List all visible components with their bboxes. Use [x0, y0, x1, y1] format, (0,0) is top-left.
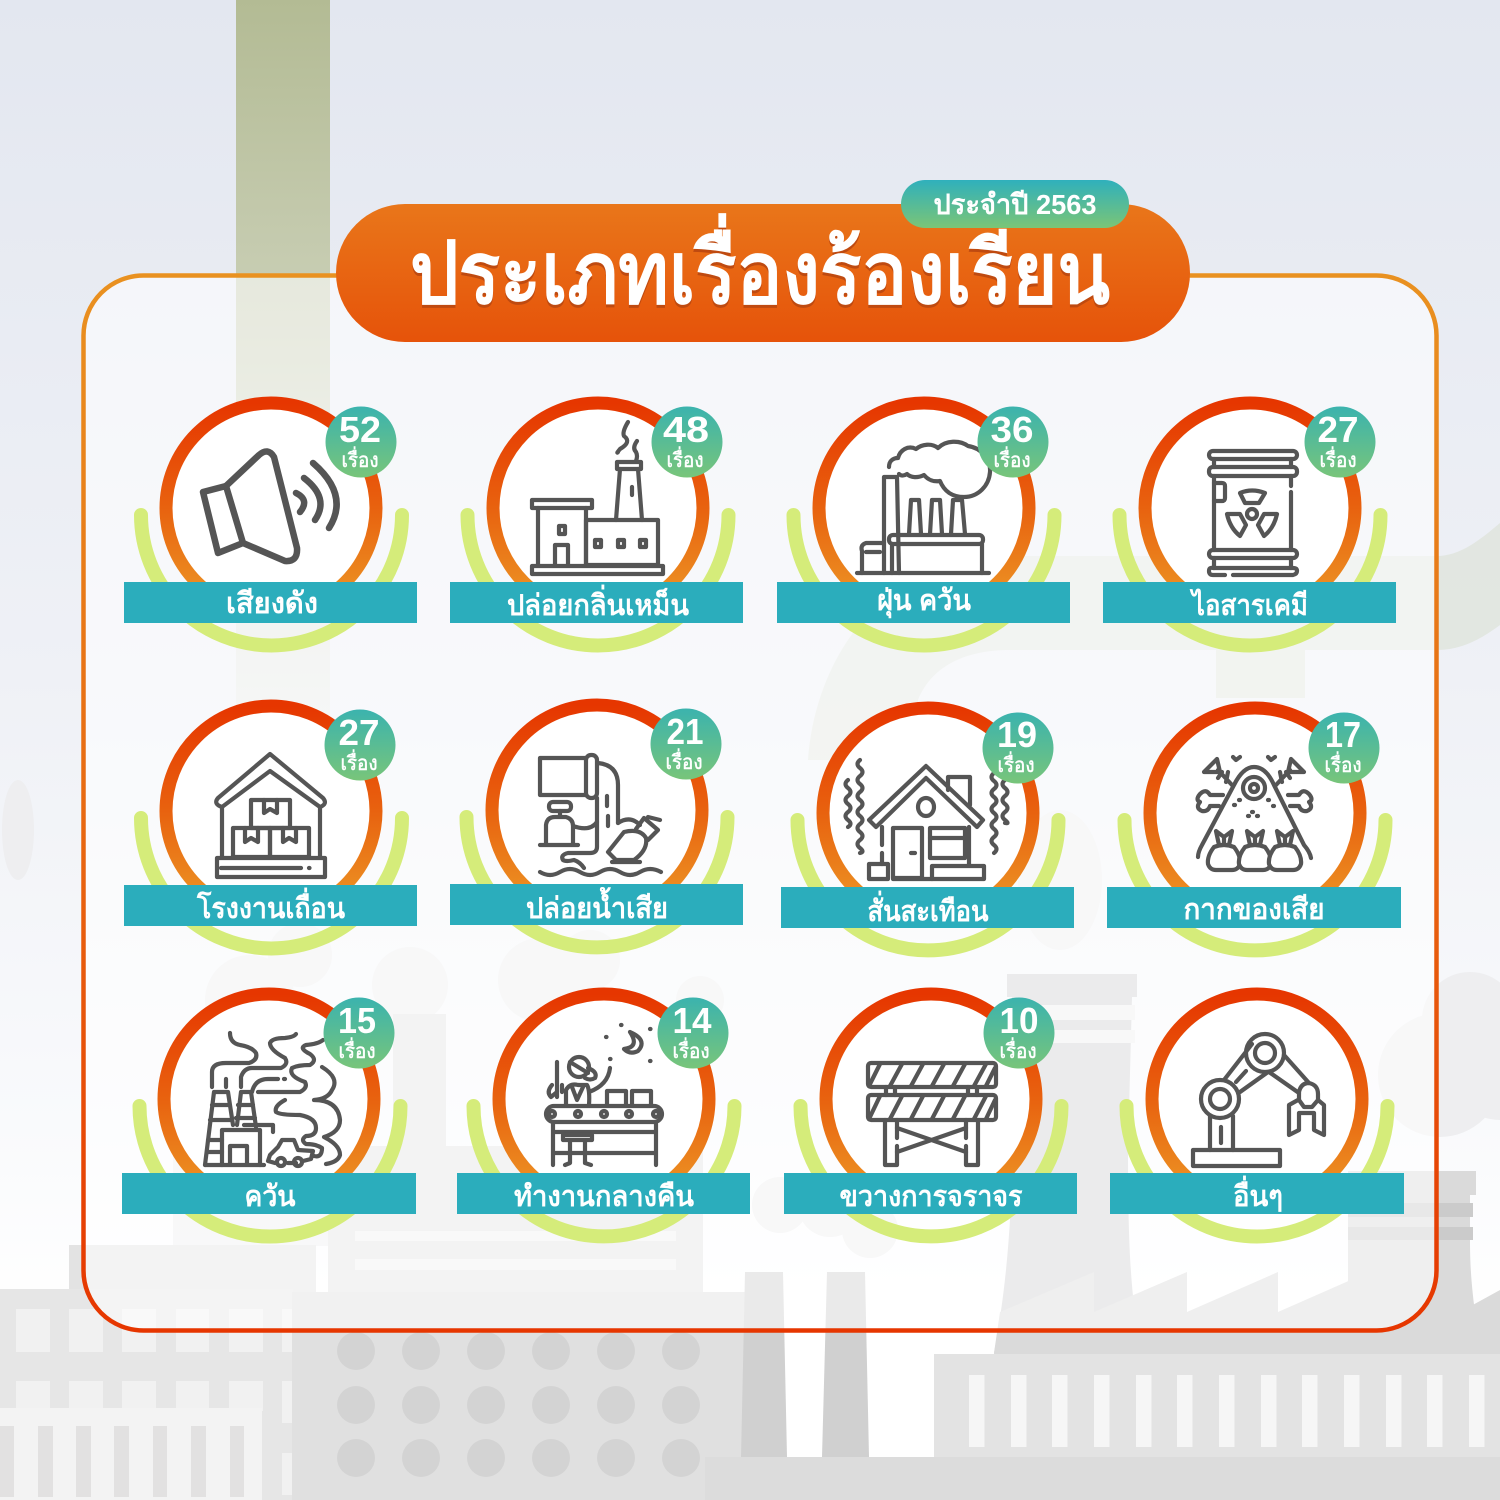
badge: เรื่อง	[666, 748, 702, 774]
badge: เรื่อง	[994, 446, 1030, 472]
background slim chimneys	[741, 1272, 869, 1457]
background sawtooth roof	[994, 1272, 1500, 1460]
ring	[1152, 994, 1362, 1204]
ring	[1145, 403, 1355, 613]
arc	[140, 1106, 400, 1236]
icon: night worker	[546, 1025, 662, 1165]
badge: เรื่อง	[1320, 446, 1356, 472]
ring	[1150, 708, 1360, 918]
badge	[324, 998, 394, 1068]
label bar: ฝุ่น ควัน	[877, 585, 971, 618]
ring	[499, 994, 709, 1204]
badge: เรื่อง	[672, 1037, 710, 1063]
badge: เรื่อง	[338, 1037, 376, 1063]
background cooling tower	[990, 974, 1137, 1400]
card: noise	[124, 403, 417, 645]
ring	[166, 403, 376, 613]
label bar: โรงงานเถื่อน	[196, 887, 345, 925]
card: odor	[450, 403, 743, 646]
badge: 27	[338, 712, 380, 753]
badge: 19	[997, 714, 1037, 755]
title banner	[336, 204, 1190, 342]
badge: 17	[1325, 714, 1361, 755]
arc	[1120, 515, 1380, 646]
ring	[493, 403, 703, 613]
badge	[1304, 406, 1376, 478]
label bar	[1103, 582, 1396, 623]
badge: เรื่อง	[1000, 1037, 1036, 1063]
arc	[1126, 1106, 1388, 1236]
icon: robot arm	[1193, 1034, 1324, 1166]
label bar	[124, 582, 417, 623]
background pipe flange	[1216, 650, 1305, 698]
label bar	[457, 1173, 750, 1214]
ring	[164, 994, 374, 1204]
label bar: เสียงดัง	[226, 588, 318, 620]
label bar: ทำงานกลางคืน	[514, 1181, 694, 1213]
icon: speaker	[203, 451, 337, 561]
badge: 27	[1318, 409, 1358, 450]
icon: barricade	[868, 1063, 996, 1165]
arc	[141, 515, 402, 645]
ring	[166, 706, 376, 916]
label bar: ไอสารเคมี	[1189, 588, 1308, 622]
background smoke	[2, 780, 1500, 1258]
label bar	[122, 1173, 416, 1214]
badge	[982, 712, 1054, 784]
background green pipe	[808, 523, 1500, 760]
icon: trash mound	[1198, 757, 1312, 870]
background middle building	[292, 1292, 745, 1500]
card: others	[1110, 994, 1404, 1236]
ring	[492, 705, 702, 915]
badge: 36	[990, 409, 1034, 450]
arc	[141, 818, 402, 948]
badge	[984, 998, 1054, 1068]
card: night work	[457, 994, 750, 1236]
ring	[819, 403, 1029, 613]
badge: เรื่อง	[340, 749, 378, 775]
badge	[978, 406, 1048, 478]
arc	[1124, 820, 1386, 950]
arc	[468, 515, 728, 646]
label bar	[1107, 887, 1401, 928]
badge	[324, 710, 396, 780]
background ground	[705, 1457, 1500, 1500]
icon: shaking house	[846, 760, 1008, 879]
arc	[474, 1106, 734, 1236]
background right building	[934, 1354, 1500, 1458]
badge	[326, 406, 396, 478]
card: illegal factory	[124, 706, 417, 948]
badge: 48	[663, 409, 709, 450]
label bar: กากของเสีย	[1184, 894, 1324, 926]
label bar	[1110, 1173, 1404, 1214]
arc	[798, 820, 1058, 950]
card: dust smoke	[777, 403, 1070, 646]
label bar: ควัน	[244, 1181, 296, 1213]
arc	[800, 1106, 1062, 1236]
panel	[84, 276, 1436, 1330]
label bar	[781, 887, 1074, 928]
label bar	[450, 884, 743, 925]
badge	[1308, 712, 1380, 784]
badge	[650, 708, 722, 780]
background right tower	[1340, 1171, 1476, 1360]
icon: factory with cloud	[857, 442, 990, 573]
title: ประเภทเรื่องร้องเรียน	[410, 212, 1110, 322]
card: vibration	[781, 708, 1074, 950]
card: waste residue	[1107, 708, 1401, 950]
icon: factory smell	[532, 422, 663, 574]
icon: warehouse	[216, 754, 325, 877]
ring	[823, 708, 1033, 918]
badge	[652, 406, 722, 478]
label bar: สั่นสะเทือน	[868, 890, 989, 928]
card: chemical	[1103, 403, 1396, 646]
arc	[466, 817, 728, 947]
icon: waste water	[540, 755, 661, 875]
badge: เรื่อง	[342, 446, 378, 472]
label bar: อื่นๆ	[1233, 1175, 1283, 1213]
label bar	[777, 582, 1070, 623]
card: smoke	[122, 994, 416, 1236]
year text: ประจำปี 2563	[934, 189, 1096, 220]
background upper blocks	[69, 1014, 703, 1296]
badge: เรื่อง	[998, 751, 1034, 777]
label bar: ขวางการจราจร	[840, 1181, 1023, 1213]
year pill	[901, 180, 1129, 228]
label bar	[450, 582, 743, 623]
label bar: ปล่อยน้ำเสีย	[526, 886, 668, 925]
badge: เรื่อง	[666, 446, 704, 472]
label bar	[784, 1173, 1077, 1214]
badge: 15	[338, 1000, 376, 1041]
badge: 52	[339, 409, 381, 450]
ring	[826, 994, 1036, 1204]
arc	[794, 515, 1054, 646]
background left building	[0, 1289, 293, 1500]
label bar: ปล่อยกลิ่นเหม็น	[507, 584, 689, 622]
card: traffic obstruction	[784, 994, 1077, 1236]
icon: chemical barrel	[1209, 451, 1297, 575]
label bar	[124, 885, 417, 926]
background chimney	[236, 0, 330, 900]
badge: เรื่อง	[1324, 751, 1362, 777]
badge	[658, 998, 728, 1068]
badge: 10	[1000, 1000, 1038, 1041]
icon: smoke factory	[205, 1033, 340, 1166]
badge: 14	[672, 1000, 712, 1041]
card: waste water	[450, 705, 743, 947]
badge: 21	[666, 711, 704, 752]
